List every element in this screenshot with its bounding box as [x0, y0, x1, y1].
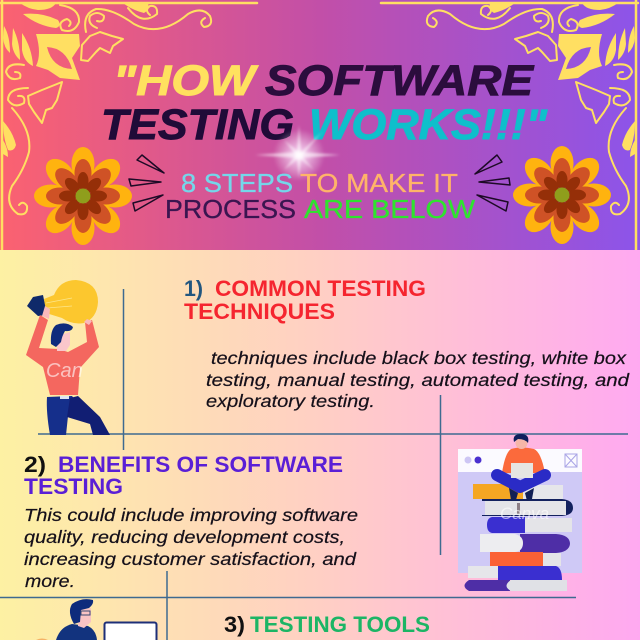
heading: step 1: TECHNIQUES — [184, 299, 335, 324]
divider lines — [0, 289, 628, 640]
flower left — [34, 147, 132, 245]
title: SOFTWARE — [265, 57, 534, 105]
heading: step 1 — [184, 276, 426, 324]
heading: step 1: 1) — [184, 276, 203, 301]
header banner — [0, 0, 640, 250]
heading: step 1: COMMON TESTING — [215, 276, 426, 301]
text block: step 1: testing, manual testing, automated testing, and — [206, 370, 630, 390]
text block: step 2: increasing customer satisfaction, and — [24, 549, 357, 569]
burst marks right — [475, 155, 510, 211]
subtitle — [165, 168, 476, 224]
subtitle: 8 STEPS — [181, 168, 293, 198]
heading: step 3: 3) — [224, 612, 245, 637]
icon: person on stack of books — [458, 434, 582, 591]
heading: step 2: 2) — [24, 452, 46, 477]
flower right — [513, 146, 611, 244]
icon: person lifting light bulb: Can — [46, 360, 83, 382]
heading: step 3: TESTING TOOLS — [250, 612, 430, 637]
panel: step 3 testing tools — [36, 599, 430, 640]
sparkle — [255, 125, 340, 181]
icon: person on stack of books: Canva — [500, 504, 549, 523]
text block: step 1 — [206, 348, 630, 411]
corner ornament: top left — [0, 0, 257, 250]
heading: step 2 — [24, 452, 343, 499]
text block: step 1: techniques include black box testing, white box — [211, 348, 627, 368]
subtitle: PROCESS — [165, 194, 296, 224]
icon: person lifting light bulb — [26, 280, 110, 435]
title: "HOW — [113, 57, 259, 105]
title: WORKS!!!" — [309, 101, 548, 149]
panel: step 1 common testing techniques — [26, 276, 630, 435]
subtitle: ARE BELOW — [304, 194, 476, 224]
burst marks left — [129, 155, 164, 211]
heading: step 2: BENEFITS OF SOFTWARE — [58, 452, 343, 477]
title — [101, 57, 548, 149]
title: TESTING — [101, 101, 294, 149]
panel: step 2 benefits of software testing — [24, 434, 582, 591]
text block: step 2: quality, reducing development costs, — [24, 527, 345, 547]
subtitle: TO MAKE IT — [300, 168, 458, 198]
icon: person at computer — [36, 599, 156, 640]
corner ornament: top right — [381, 0, 638, 250]
text block: step 2 — [24, 505, 358, 591]
text block: step 2: more. — [25, 571, 75, 591]
text block: step 1: exploratory testing. — [206, 391, 375, 411]
body background — [0, 250, 640, 640]
heading: step 2: TESTING — [24, 474, 123, 499]
books — [473, 484, 523, 499]
text block: step 2: This could include improving software — [24, 505, 358, 525]
person — [502, 448, 545, 473]
